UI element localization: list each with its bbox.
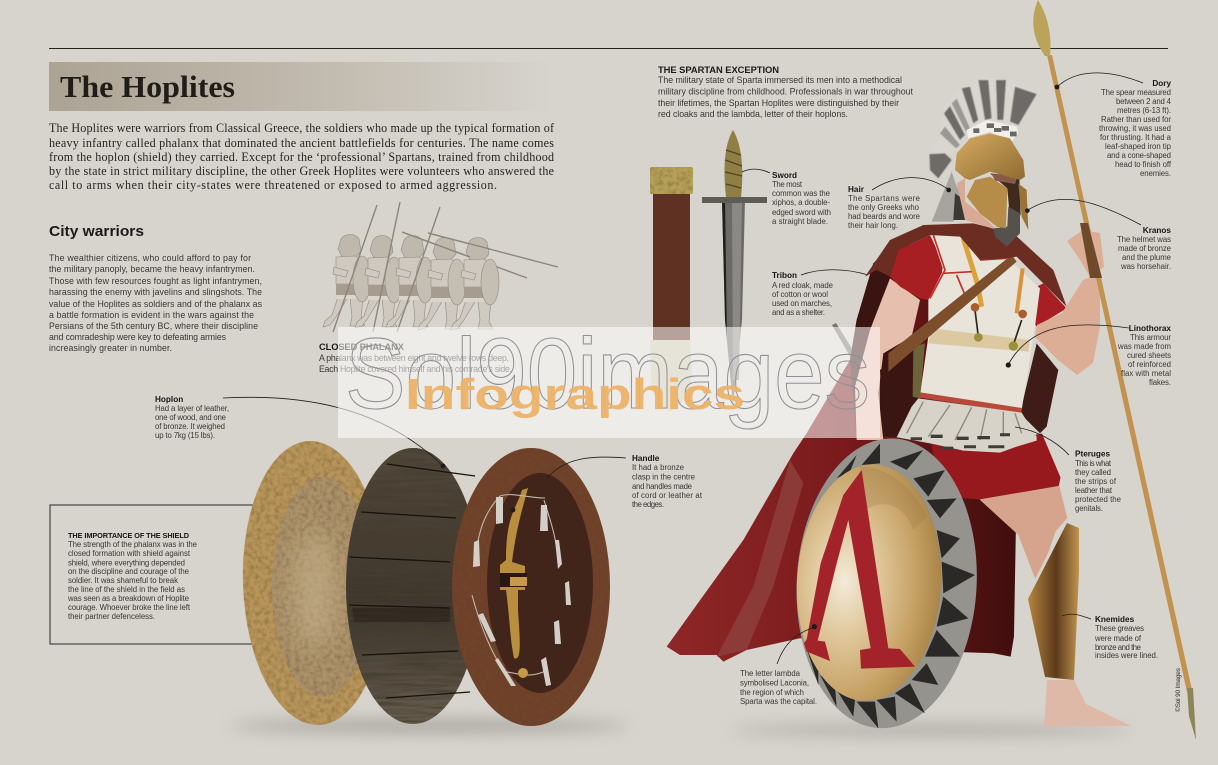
linothorax label: flax with metal <box>1121 369 1171 378</box>
cord tassels <box>472 495 558 675</box>
layer: leather <box>452 448 610 726</box>
hoplon label: Had a layer of leather, <box>155 404 229 413</box>
title band <box>49 62 555 111</box>
scabbard <box>650 167 693 411</box>
closed phalanx caption: Each Hoplite covered himself and his comrade’s side. <box>319 364 512 374</box>
dory label: Rather than used for <box>1101 115 1171 124</box>
knemides label: insides were lined. <box>1095 651 1158 660</box>
sword label: a straight blade. <box>772 217 828 226</box>
linothorax label: of reinforced <box>1128 360 1171 369</box>
knemides label: These greaves <box>1095 624 1144 633</box>
pteruges label: the strips of <box>1075 477 1117 486</box>
tribon label: of cotton or wool <box>772 290 828 299</box>
spartan shield <box>789 434 984 733</box>
leader: kranos <box>1028 199 1141 225</box>
bronze bowl <box>791 461 947 705</box>
text block: spartan exception: military discipline from childhood. Professionals in war throughout <box>658 86 914 96</box>
linothorax label <box>1117 324 1171 387</box>
heading: city warriors: City warriors <box>49 224 144 240</box>
foot <box>1044 680 1131 726</box>
sword hilt at hip <box>832 323 856 358</box>
handle label <box>632 454 703 509</box>
sword label: common was the <box>772 189 830 198</box>
dory label: and a cone-shaped <box>1107 151 1171 160</box>
handle label: Handle <box>632 454 660 463</box>
dory label: for thrusting. It had a <box>1100 133 1172 142</box>
baldric strap <box>888 255 1017 372</box>
knemides label: bronze and the <box>1095 643 1141 652</box>
linothorax label: flakes. <box>1149 378 1171 387</box>
dory label: head to finish off <box>1115 160 1172 169</box>
cloak <box>667 237 1058 662</box>
red skirt <box>930 434 1061 499</box>
leader: sword <box>742 169 770 173</box>
kranos label: was horsehair. <box>1120 262 1171 271</box>
leader: linothorax <box>1008 325 1129 365</box>
kranos label: and the plume <box>1122 253 1171 262</box>
pteruges label: leather that <box>1075 486 1113 495</box>
hair label: their hair long. <box>848 221 898 230</box>
box: importance of the shield: closed formation with shield against <box>68 549 191 558</box>
handle label: It had a bronze <box>632 463 684 472</box>
watermark outline text: Sol90images <box>345 318 870 430</box>
text block: spartan exception: The military state of Sparta immersed its men into a methodical <box>658 75 902 85</box>
leader: handle <box>511 457 626 512</box>
figure 4 <box>418 238 466 330</box>
leader: tribon <box>801 270 868 275</box>
ground shadow under warrior <box>730 725 1130 735</box>
box: importance of the shield: courage. Whoever broke the line left <box>68 603 191 612</box>
leader: hoplon <box>223 397 445 468</box>
pteruges <box>897 398 1037 453</box>
box: importance of the shield: soldier. It was shameful to break <box>68 576 178 585</box>
linothorax label: Linothorax <box>1129 324 1171 333</box>
handle label: clasp in the centre <box>632 472 695 482</box>
hoplon label: of bronze. It weighed <box>155 422 225 431</box>
layer: wood <box>346 448 480 724</box>
text block: spartan exception <box>658 75 914 119</box>
ground shadow under shield <box>230 720 630 732</box>
lambda emblem <box>804 470 915 669</box>
linothorax label: This armour <box>1130 333 1171 342</box>
handle label: the edges. <box>632 500 664 509</box>
pteruges label: Pteruges <box>1075 450 1110 458</box>
hoplon label: one of wood, and one <box>155 413 226 422</box>
sword label: edged sword with <box>772 208 831 217</box>
lambda caption: The letter lambda <box>740 669 801 678</box>
tribon label: used on marches, <box>772 299 832 308</box>
intro paragraph: by the state in strict military discipline, the other Greek Hoplites were volunteers who answered the <box>49 164 554 178</box>
title band: The Hoplites <box>60 69 235 104</box>
pteruges label: genitals. <box>1075 504 1103 513</box>
box: importance of the shield <box>50 505 262 644</box>
hoplon label: Hoplon <box>155 395 183 404</box>
hair label: the only Greeks who <box>848 203 920 212</box>
hair label: Hair <box>848 185 865 194</box>
lambda caption: the region of which <box>740 688 804 697</box>
kranos label: The helmet was <box>1117 235 1171 244</box>
text block: spartan exception: their lifetimes, the Spartan Hoplites were distinguished by their <box>658 98 899 108</box>
lambda caption: symbolised Laconia, <box>740 678 809 688</box>
box: importance of the shield: THE IMPORTANCE OF THE SHIELD <box>68 531 189 540</box>
text block: spartan exception: red cloaks and the lambda, letter of their hoplons. <box>658 109 848 119</box>
hair label: The Spartans were <box>848 194 920 203</box>
intro paragraph: from the hoplon (shield) they carried. Except for the ‘professional’ Spartans, trained from childhood <box>49 150 554 164</box>
text block: city warriors <box>49 253 263 353</box>
knemides label: were made of <box>1094 634 1142 643</box>
closed phalanx caption <box>319 341 512 374</box>
left arm <box>855 278 920 440</box>
intro paragraph <box>49 121 555 192</box>
text block: city warriors: increasingly greater in number. <box>49 343 172 353</box>
knemides label <box>1094 615 1158 660</box>
text block: city warriors: and comradeship were key to defeating armies <box>49 332 227 342</box>
warrior figure <box>667 0 1196 740</box>
dory label: The spear measured <box>1101 88 1171 97</box>
pteruges label: they called <box>1075 468 1111 477</box>
hoplon label <box>155 395 229 440</box>
leader: dory <box>1057 73 1143 87</box>
dory label: Dory <box>1152 79 1171 88</box>
text block: city warriors: the military panoply, became the heavy infantrymen. <box>49 264 255 274</box>
kranos label: Kranos <box>1143 226 1171 235</box>
watermark orange text: Infographics <box>405 370 745 419</box>
lambda caption <box>740 669 817 706</box>
hoplon layers <box>238 439 610 727</box>
closed phalanx caption: CLOSED PHALANX <box>319 341 405 352</box>
layer: bronze <box>238 439 390 727</box>
tribon label: A red cloak, made <box>772 281 833 290</box>
handle label: and handles made <box>632 482 692 491</box>
sword label: The most <box>772 180 803 189</box>
helmet and face <box>946 133 1030 247</box>
leader: hair <box>872 178 949 190</box>
dory label: leaf-shaped iron tip <box>1105 142 1172 151</box>
sword label: Sword <box>772 171 797 180</box>
heading: the spartan exception: THE SPARTAN EXCEPTION <box>658 64 779 75</box>
pteruges label: This is what <box>1075 459 1112 468</box>
bronze handle <box>500 488 528 658</box>
leader: pteruges <box>1015 427 1069 455</box>
hair label: had beards and wore <box>848 212 920 221</box>
box: importance of the shield: the line of the shield in the field as <box>68 585 185 594</box>
crest <box>928 77 1037 178</box>
intro paragraph: The Hoplites were warriors from Classical Greece, the soldiers who made up the typical formation of <box>49 121 555 135</box>
closed phalanx caption: A phalanx was between eight and twelve rows deep. <box>319 353 509 363</box>
intro paragraph: call to arms when their city-states were threatened or exposed to armed aggression. <box>49 178 497 192</box>
sword label: xiphos, a double- <box>772 198 830 207</box>
handle label: of cord or leather at <box>632 491 703 500</box>
linothorax label: was made from <box>1117 342 1171 351</box>
box: importance of the shield: on the discipline and courage of the <box>68 567 189 576</box>
box: importance of the shield: was seen as a breakdown of Hoplite <box>67 594 189 603</box>
figure 3 <box>386 236 434 328</box>
kranos label <box>1117 226 1171 271</box>
spear <box>1033 0 1196 740</box>
credit: ©Sol 90 Images <box>1174 667 1182 712</box>
hair label <box>848 185 920 230</box>
text block: city warriors: Those with few resources fought as light infantrymen, <box>49 276 262 286</box>
text block: city warriors: Persians of the 5th century BC, where their discipline <box>49 321 258 331</box>
text block: city warriors: a battle formation is evident in the wars against the <box>49 310 254 320</box>
dory label: throwing, it was used <box>1099 124 1171 133</box>
tribon label: Tribon <box>772 271 797 280</box>
box: importance of the shield: their partner defenceless. <box>68 612 155 621</box>
watermark band <box>338 318 880 438</box>
tunic sleeves <box>890 235 1067 327</box>
tribon label <box>772 271 833 317</box>
text block: city warriors: The wealthier citizens, who could afford to pay for <box>49 253 251 263</box>
tribon label: and as a shelter. <box>772 308 825 317</box>
hoplon label: up to 7kg (15 lbs). <box>155 431 215 440</box>
shoulder drape <box>865 223 1067 307</box>
dory label <box>1099 79 1172 178</box>
sword <box>702 130 767 405</box>
figure 5 <box>451 238 499 330</box>
text block: city warriors: value of the Hoplites as soldiers and of the phalanx as <box>49 299 263 309</box>
dory label: between 2 and 4 <box>1116 97 1172 106</box>
greave <box>1028 523 1079 680</box>
box: importance of the shield: shield, where everything depended <box>68 558 185 568</box>
dory label: enemies. <box>1140 169 1171 178</box>
linothorax <box>913 235 1040 411</box>
sword label <box>772 171 831 226</box>
thigh <box>979 484 1067 579</box>
kranos label: made of bronze <box>1118 244 1171 253</box>
dark hip gap <box>880 343 920 437</box>
phalanx illustration <box>323 202 558 332</box>
figure 1 <box>323 234 371 327</box>
lambda caption: Sparta was the capital. <box>740 697 817 706</box>
box: importance of the shield: The strength of the phalanx was in the <box>68 540 197 549</box>
linothorax label: cured sheets <box>1127 351 1171 360</box>
figure 2 <box>355 236 403 328</box>
hair tail <box>932 172 965 222</box>
dory label: metres (6-13 ft). <box>1117 106 1171 115</box>
pteruges label: protected the <box>1075 495 1121 504</box>
hand on spear <box>1067 223 1104 278</box>
intro paragraph: heavy infantry called phalanx that dominated the ancient battlefields for centuries. The name comes <box>49 136 554 150</box>
text block: city warriors: harassing the enemy with javelins and slingshots. The <box>49 287 262 297</box>
knemides label: Knemides <box>1095 615 1135 624</box>
leader: knemides <box>1062 614 1091 619</box>
rim triangles <box>805 443 975 728</box>
right arm <box>1035 273 1100 375</box>
leader: lambda <box>777 627 815 664</box>
pteruges label <box>1075 450 1121 513</box>
